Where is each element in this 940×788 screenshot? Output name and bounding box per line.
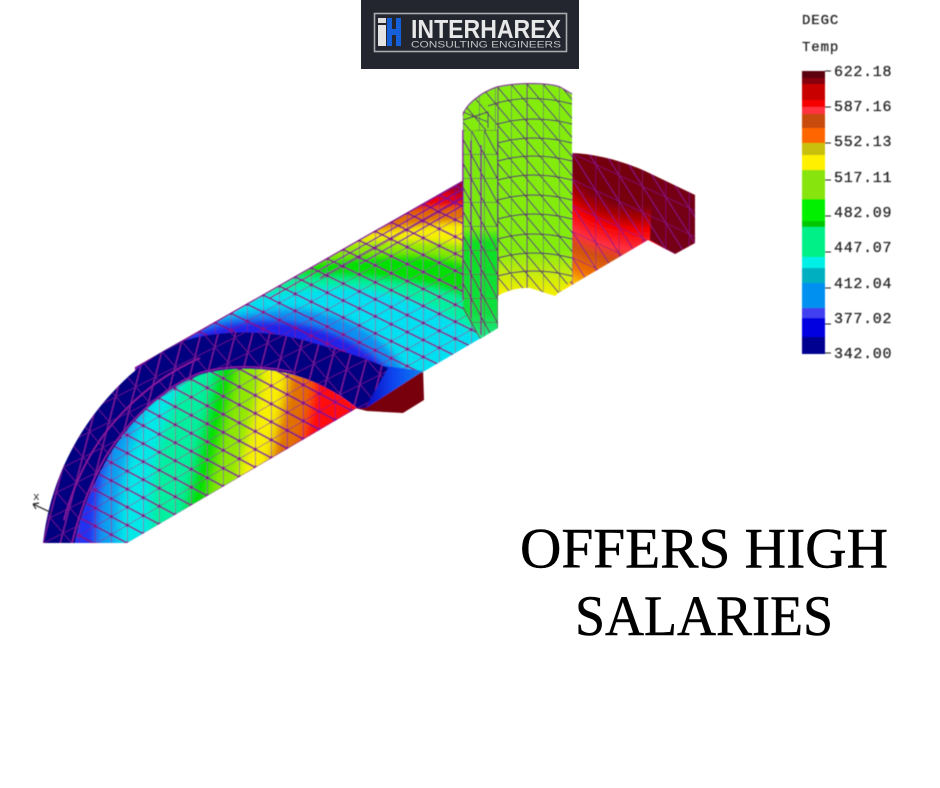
legend variable label: Temp	[802, 40, 839, 56]
legend values: 377.02	[834, 311, 892, 328]
legend values: 447.07	[834, 240, 892, 257]
finite element temperature model	[32, 82, 696, 544]
rim end lighter blue	[366, 366, 423, 408]
axis marker x	[33, 492, 52, 513]
front rainbow surface	[74, 368, 358, 544]
legend values: 517.11	[834, 170, 892, 187]
top cylindrical surface	[134, 180, 497, 392]
cylinder front face	[463, 83, 572, 296]
logo: Interharex Consulting Engineers	[361, 0, 579, 69]
legend colour bar	[802, 71, 825, 354]
legend values: 587.16	[834, 99, 892, 116]
heading	[520, 518, 888, 648]
navy outer rim	[43, 332, 388, 543]
legend values: 342.00	[834, 346, 892, 363]
heading: OFFERS HIGH	[520, 518, 888, 580]
rear heated block	[540, 153, 695, 295]
legend unit label: DEGC	[802, 13, 839, 29]
cylinder side strip	[463, 120, 498, 339]
legend values: 482.09	[834, 205, 892, 222]
heading: SALARIES	[575, 585, 833, 648]
legend ticks	[825, 71, 831, 353]
rear end cap	[650, 176, 695, 254]
axis marker x: x	[33, 492, 40, 504]
double rim line	[64, 358, 292, 543]
legend values	[834, 64, 892, 363]
legend: temperature colour scale	[802, 13, 892, 363]
logo wordmark: INTERHAREX	[411, 16, 561, 44]
front foot block	[355, 368, 424, 413]
logo tagline: CONSULTING ENGINEERS	[411, 40, 561, 50]
legend values: 412.04	[834, 276, 892, 293]
dense mesh band along upper edge	[135, 180, 465, 368]
icon: iH monogram	[378, 18, 401, 46]
legend values: 552.13	[834, 134, 892, 151]
legend values: 622.18	[834, 64, 892, 81]
